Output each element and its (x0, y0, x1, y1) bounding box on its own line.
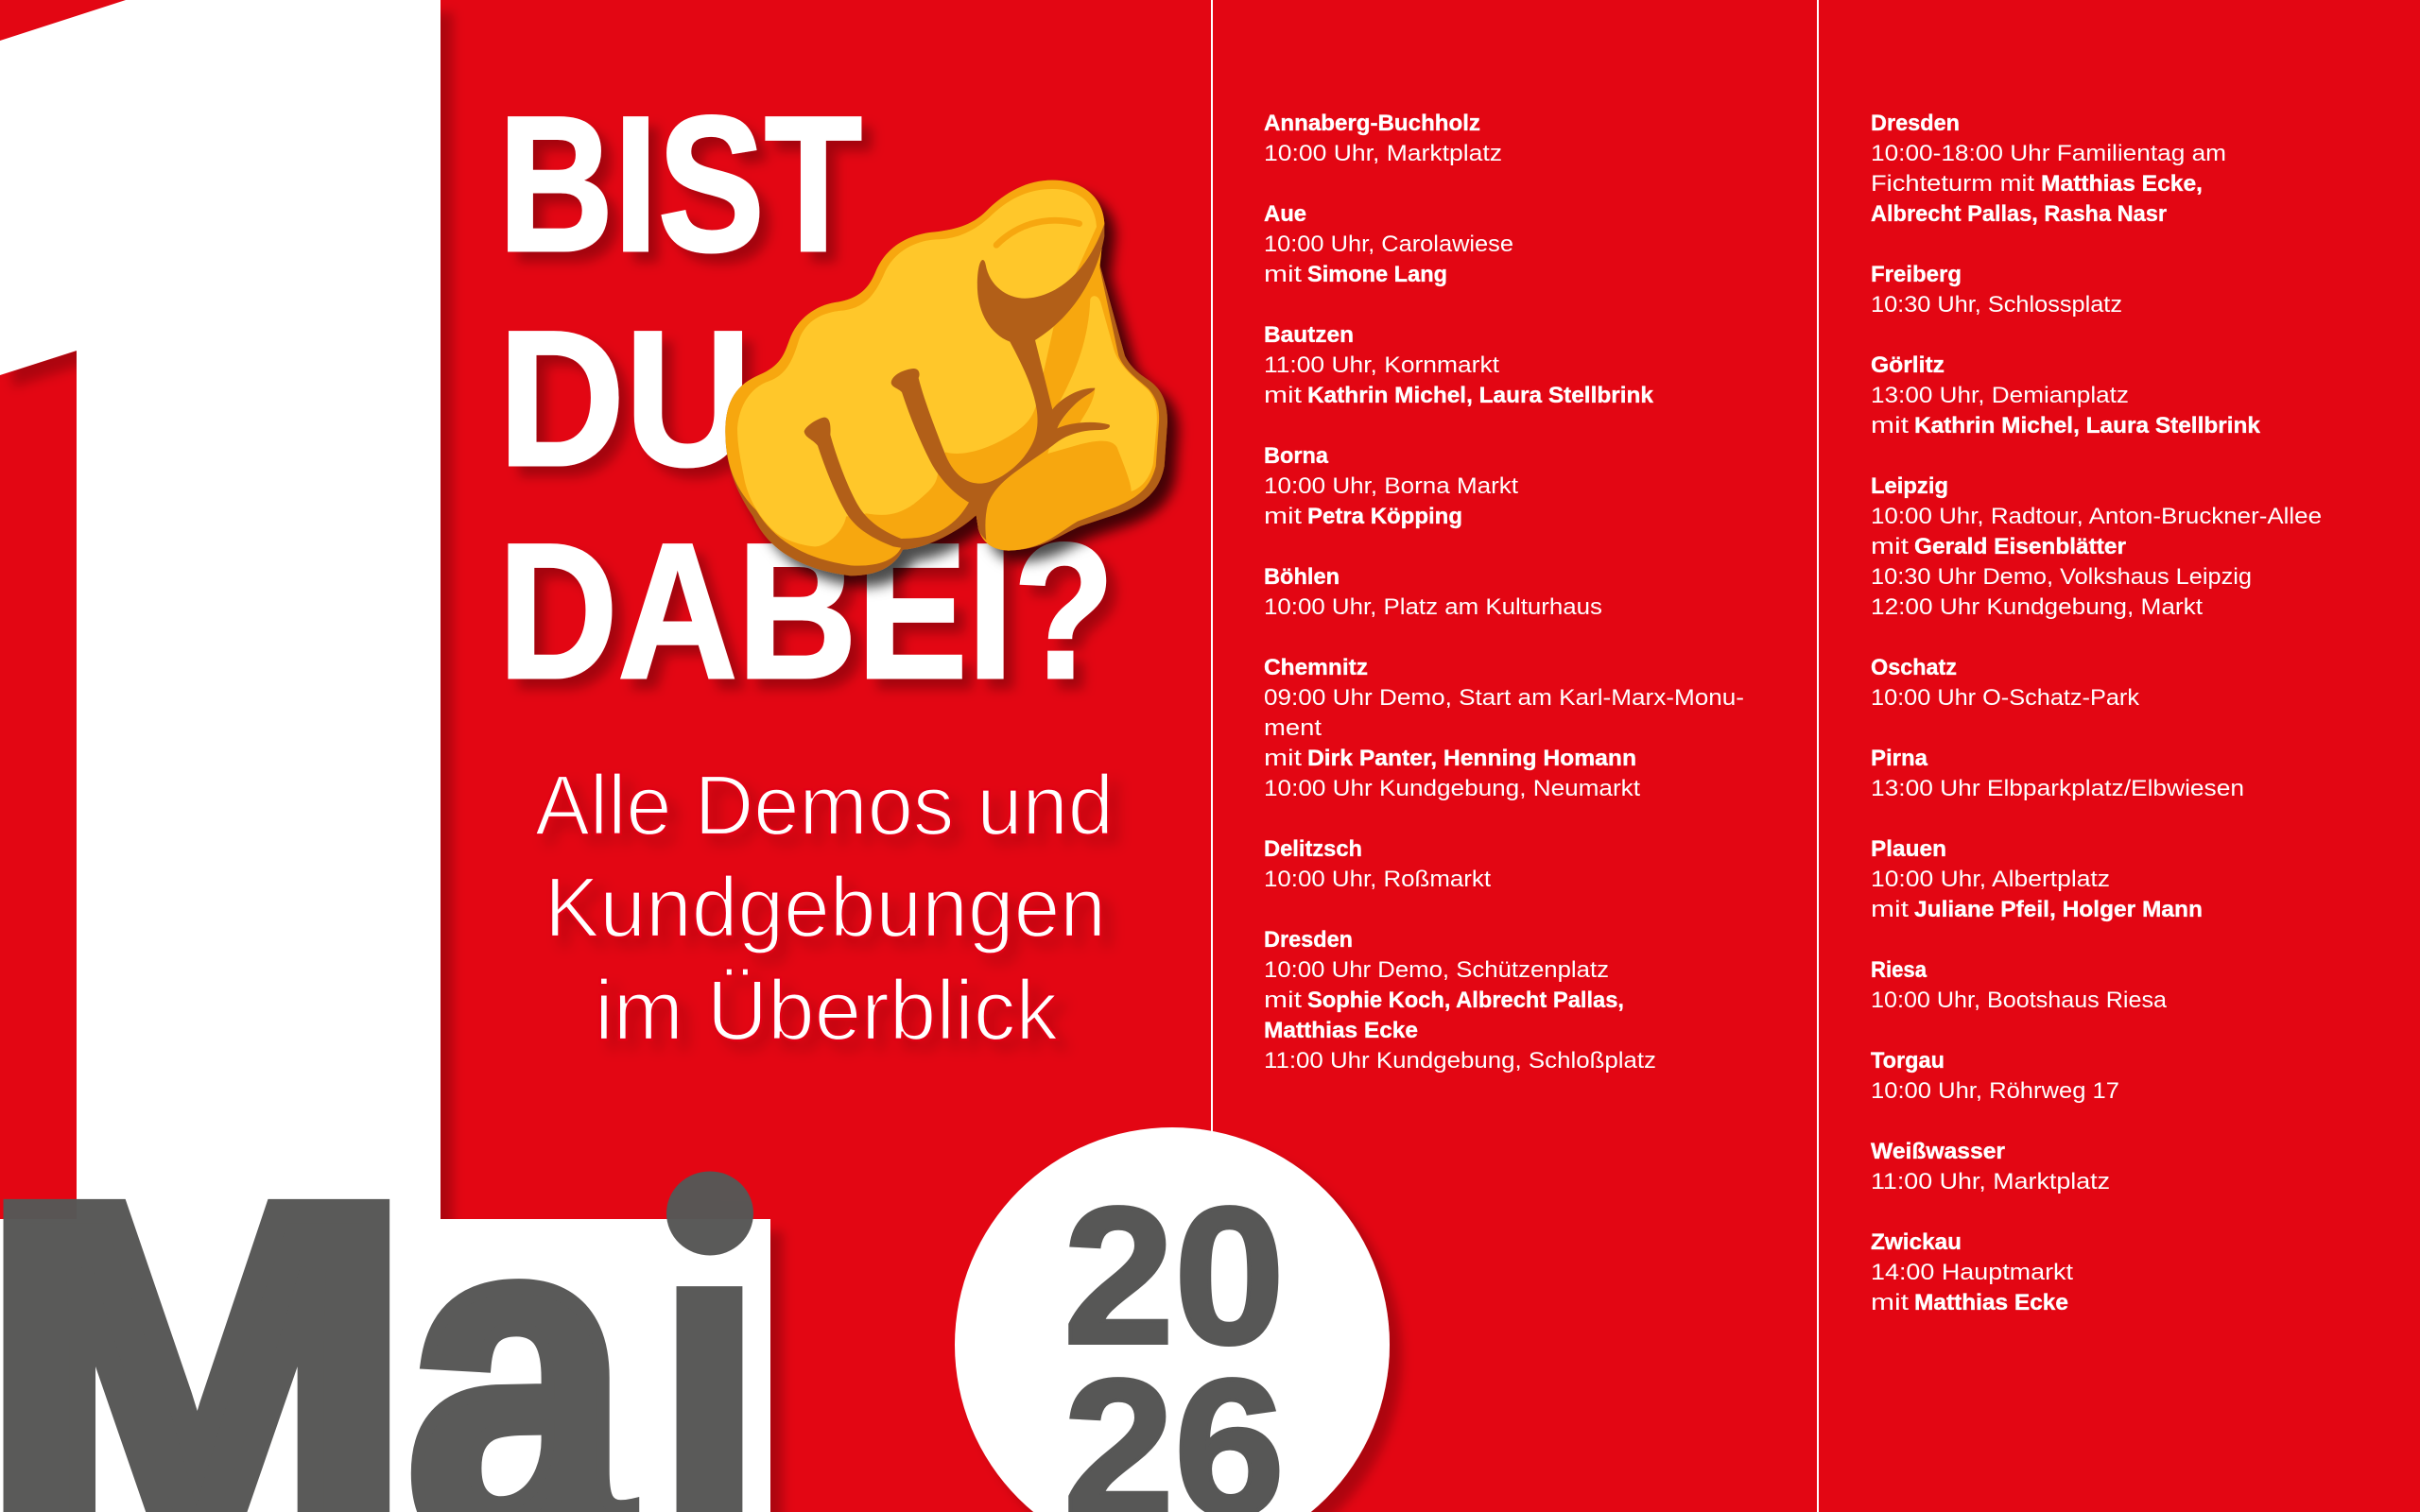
Chemnitz: ment (1264, 715, 1322, 741)
Freiberg (1871, 262, 2122, 318)
Weißwasser: 11:00 Uhr, Marktplatz (1871, 1169, 2110, 1194)
Torgau: Torgau (1871, 1048, 1945, 1074)
Borna (1264, 443, 1518, 529)
Bautzen: Kathrin Michel, Laura Stellbrink (1307, 383, 1654, 408)
Zwickau: Matthias Ecke (1914, 1290, 2068, 1315)
Riesa: Riesa (1871, 957, 1927, 983)
Aue: Simone Lang (1307, 262, 1447, 287)
back of hand highlight (1047, 296, 1157, 491)
Görlitz: mit (1871, 413, 1909, 438)
column one schedule (1264, 111, 1744, 1074)
Leipzig: Leipzig (1871, 473, 1948, 499)
month wordmark (4, 1172, 753, 1512)
Freiberg: Freiberg (1871, 262, 1962, 287)
Leipzig (1871, 473, 2322, 620)
Chemnitz (1264, 655, 1744, 801)
hand base tone (725, 180, 1159, 566)
Chemnitz: Dirk Panter, Henning Homann (1307, 746, 1636, 771)
Plauen: 10:00 Uhr, Albertplatz (1871, 867, 2110, 892)
Dresden family day: Albrecht Pallas, Rasha Nasr (1871, 201, 2167, 227)
Plauen: Plauen (1871, 836, 1946, 862)
Weißwasser (1871, 1139, 2110, 1194)
Chemnitz: mit (1264, 746, 1302, 771)
Oschatz: 10:00 Uhr O-Schatz-Park (1871, 685, 2140, 711)
year circle: 20 (1063, 1167, 1285, 1384)
Zwickau: Zwickau (1871, 1229, 1962, 1255)
Borna: Petra Köpping (1307, 504, 1462, 529)
Bautzen: 11:00 Uhr, Kornmarkt (1264, 352, 1499, 378)
Borna: Borna (1264, 443, 1329, 469)
Böhlen (1264, 564, 1602, 620)
Dresden family day: 10:00-18:00 Uhr Familientag am (1871, 141, 2226, 166)
Dresden demo (1264, 927, 1656, 1074)
Dresden family day: Dresden (1871, 111, 1960, 136)
Zwickau: mit (1871, 1290, 1909, 1315)
Oschatz (1871, 655, 2140, 711)
Aue: 10:00 Uhr, Carolawiese (1264, 232, 1513, 257)
Annaberg-Buchholz (1264, 111, 1502, 166)
Riesa (1871, 957, 2168, 1013)
Torgau (1871, 1048, 2119, 1104)
Böhlen: Böhlen (1264, 564, 1340, 590)
Dresden demo: mit (1264, 988, 1302, 1013)
headline (498, 77, 1115, 719)
leaf shade (1057, 389, 1095, 428)
Bautzen (1264, 322, 1654, 408)
Riesa: 10:00 Uhr, Bootshaus Riesa (1871, 988, 2168, 1013)
Plauen: Juliane Pfeil, Holger Mann (1914, 897, 2203, 922)
Borna: mit (1264, 504, 1302, 529)
Pirna: Pirna (1871, 746, 1928, 771)
column two schedule (1871, 111, 2322, 1315)
Delitzsch: 10:00 Uhr, Roßmarkt (1264, 867, 1491, 892)
Aue: Aue (1264, 201, 1306, 227)
Dresden demo: Matthias Ecke (1264, 1018, 1418, 1043)
Leipzig: 12:00 Uhr Kundgebung, Markt (1871, 594, 2203, 620)
Zwickau (1871, 1229, 2073, 1315)
Borna: 10:00 Uhr, Borna Markt (1264, 473, 1518, 499)
headline: BIST (498, 77, 862, 292)
Görlitz: 13:00 Uhr, Demianplatz (1871, 383, 2129, 408)
Annaberg-Buchholz: Annaberg-Buchholz (1264, 111, 1480, 136)
Plauen (1871, 836, 2203, 922)
fist highlight (737, 189, 1097, 546)
white number one with base panel (0, 0, 770, 1512)
Chemnitz: 10:00 Uhr Kundgebung, Neumarkt (1264, 776, 1640, 801)
Pirna (1871, 746, 2244, 801)
i dot (666, 1172, 753, 1255)
knuckle creases (804, 224, 1110, 548)
Dresden family day: Fichteturm mit (1871, 171, 2034, 197)
Oschatz: Oschatz (1871, 655, 1957, 680)
year circle (955, 1127, 1390, 1512)
icon: pointing hand (725, 180, 1167, 576)
Zwickau: 14:00 Hauptmarkt (1871, 1260, 2073, 1285)
Plauen: mit (1871, 897, 1909, 922)
Görlitz (1871, 352, 2261, 438)
Dresden family day (1871, 111, 2226, 227)
Görlitz: Kathrin Michel, Laura Stellbrink (1914, 413, 2261, 438)
Böhlen: 10:00 Uhr, Platz am Kulturhaus (1264, 594, 1602, 620)
Bautzen: Bautzen (1264, 322, 1354, 348)
Chemnitz: Chemnitz (1264, 655, 1368, 680)
Leipzig: 10:30 Uhr Demo, Volkshaus Leipzig (1871, 564, 2252, 590)
subtitle: Alle Demos und (535, 759, 1114, 853)
Aue (1264, 201, 1513, 287)
Dresden demo: Sophie Koch, Albrecht Pallas, (1307, 988, 1624, 1013)
Torgau: 10:00 Uhr, Röhrweg 17 (1871, 1078, 2119, 1104)
Dresden family day: Matthias Ecke, (2041, 171, 2203, 197)
headline: DU (498, 291, 752, 507)
Leipzig: mit (1871, 534, 1909, 559)
Leipzig: 10:00 Uhr, Radtour, Anton-Bruckner-Allee (1871, 504, 2322, 529)
subtitle (535, 759, 1114, 1058)
Aue: mit (1264, 262, 1302, 287)
Weißwasser: Weißwasser (1871, 1139, 2005, 1164)
Dresden demo: 11:00 Uhr Kundgebung, Schloßplatz (1264, 1048, 1656, 1074)
fingertip nail crease (996, 220, 1080, 245)
Dresden demo: 10:00 Uhr Demo, Schützenplatz (1264, 957, 1609, 983)
Dresden demo: Dresden (1264, 927, 1353, 953)
column divider left (1211, 0, 1213, 1172)
Freiberg: 10:30 Uhr, Schlossplatz (1871, 292, 2122, 318)
headline: DABEI? (498, 504, 1115, 719)
Leipzig: Gerald Eisenblätter (1914, 534, 2126, 559)
Görlitz: Görlitz (1871, 352, 1945, 378)
column divider right (1817, 0, 1819, 1512)
Pirna: 13:00 Uhr Elbparkplatz/Elbwiesen (1871, 776, 2244, 801)
subtitle: im Überblick (595, 964, 1059, 1058)
Chemnitz: 09:00 Uhr Demo, Start am Karl-Marx-Monu- (1264, 685, 1744, 711)
Annaberg-Buchholz: 10:00 Uhr, Marktplatz (1264, 141, 1502, 166)
subtitle: Kundgebungen (544, 861, 1106, 955)
Delitzsch (1264, 836, 1491, 892)
Bautzen: mit (1264, 383, 1302, 408)
Delitzsch: Delitzsch (1264, 836, 1362, 862)
